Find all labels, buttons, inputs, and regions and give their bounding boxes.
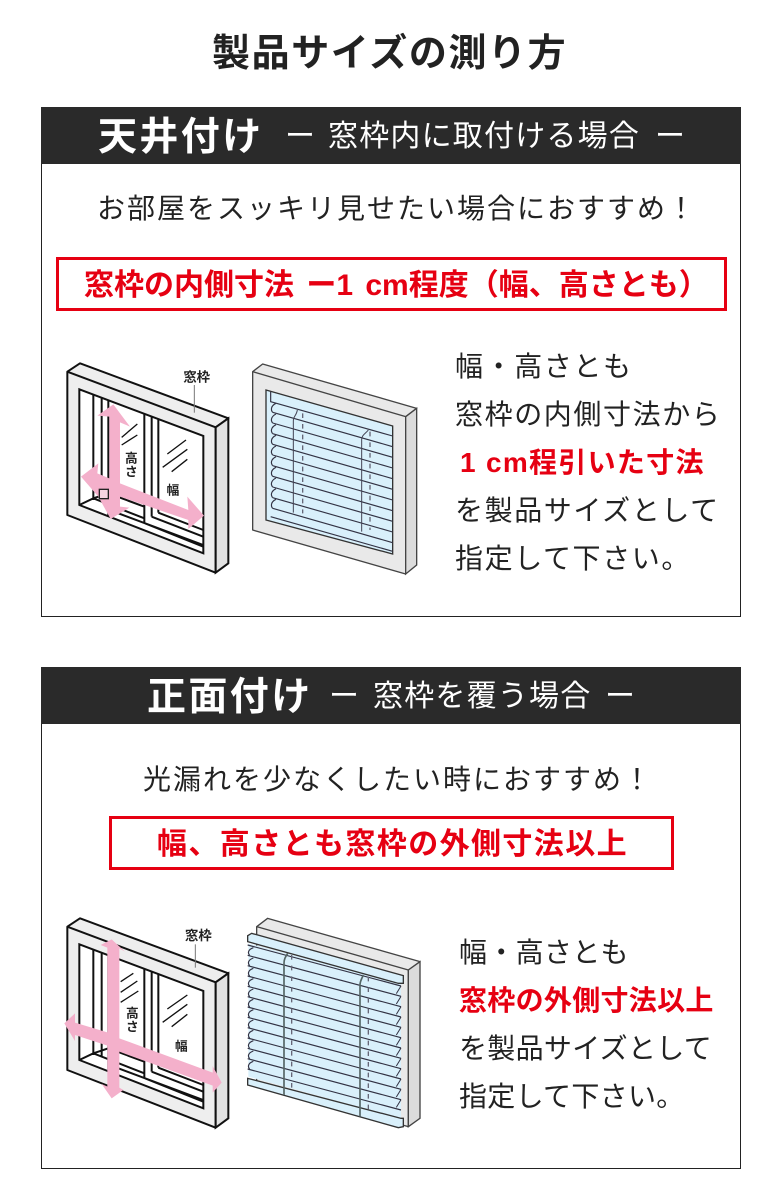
heading: face mount: 正面付け (147, 676, 313, 719)
callout text: size rule: 窓枠の内側寸法 ー1 cm程度（幅、高さとも） (84, 269, 709, 302)
recommendation text: 光漏れを少なくしたい時におすすめ！ (143, 764, 653, 795)
text block: ceiling mount instructions: 1 cm程引いた寸法 (460, 447, 705, 478)
panel: face mount frame (41, 667, 741, 1169)
text block: face mount instructions: 指定して下さい。 (459, 1081, 685, 1112)
subheading: inside frame: 窓枠内に取付ける場合 (328, 120, 640, 153)
callout box: size rule (56, 257, 727, 311)
text block: ceiling mount instructions: 幅・高さとも (455, 351, 633, 382)
header bar: ceiling mount (41, 107, 741, 164)
text block: ceiling mount instructions (455, 351, 721, 574)
text block: face mount instructions: を製品サイズとして (459, 1033, 712, 1064)
header bar: face mount (41, 667, 741, 724)
diagram: window frame with inside measurements: 幅 (167, 483, 180, 498)
text block: ceiling mount instructions: 指定して下さい。 (455, 543, 691, 574)
heading: ceiling mount: 天井付け (98, 116, 264, 159)
diagram: window frame with inside measurements: 窓枠 (183, 369, 211, 385)
text block: ceiling mount instructions: 窓枠の内側寸法から (455, 399, 721, 430)
callout text: size rule: 幅、高さとも窓枠の外側寸法以上 (157, 828, 628, 861)
diagram: blind mounted over frame (247, 918, 421, 1128)
text block: face mount instructions: 窓枠の外側寸法以上 (459, 985, 714, 1016)
text block: face mount instructions (459, 937, 714, 1112)
subheading: cover frame: ー (329, 680, 359, 713)
diagram: window frame with inside measurements (66, 362, 230, 575)
diagram: window frame with inside measurements: さ (125, 465, 138, 479)
panel: ceiling mount frame (41, 107, 741, 617)
subheading: inside frame: ー (285, 120, 315, 153)
title: 製品サイズの測り方 (212, 33, 567, 75)
recommendation text: お部屋をスッキリ見せたい場合におすすめ！ (97, 193, 697, 224)
diagram: window frame with outside measurements (64, 917, 230, 1130)
diagram: blind mounted inside frame (252, 363, 418, 576)
icon: pink measurement arrows (81, 404, 204, 529)
callout box: size rule (109, 816, 674, 870)
diagram: window frame with outside measurements: 高 (126, 1006, 139, 1021)
diagram: window frame with outside measurements: 幅 (175, 1039, 188, 1054)
diagram: window frame with outside measurements: さ (126, 1020, 139, 1034)
subheading: cover frame: 窓枠を覆う場合 (373, 680, 591, 713)
text block: ceiling mount instructions: を製品サイズとして (455, 495, 720, 526)
diagram: window frame with inside measurements: 高 (125, 451, 138, 466)
text block: face mount instructions: 幅・高さとも (459, 937, 629, 968)
subheading: cover frame: ー (605, 680, 635, 713)
icon: pink measurement arrows (64, 939, 222, 1098)
diagram: window frame with outside measurements: 窓枠 (185, 927, 212, 943)
subheading: inside frame: ー (655, 120, 685, 153)
